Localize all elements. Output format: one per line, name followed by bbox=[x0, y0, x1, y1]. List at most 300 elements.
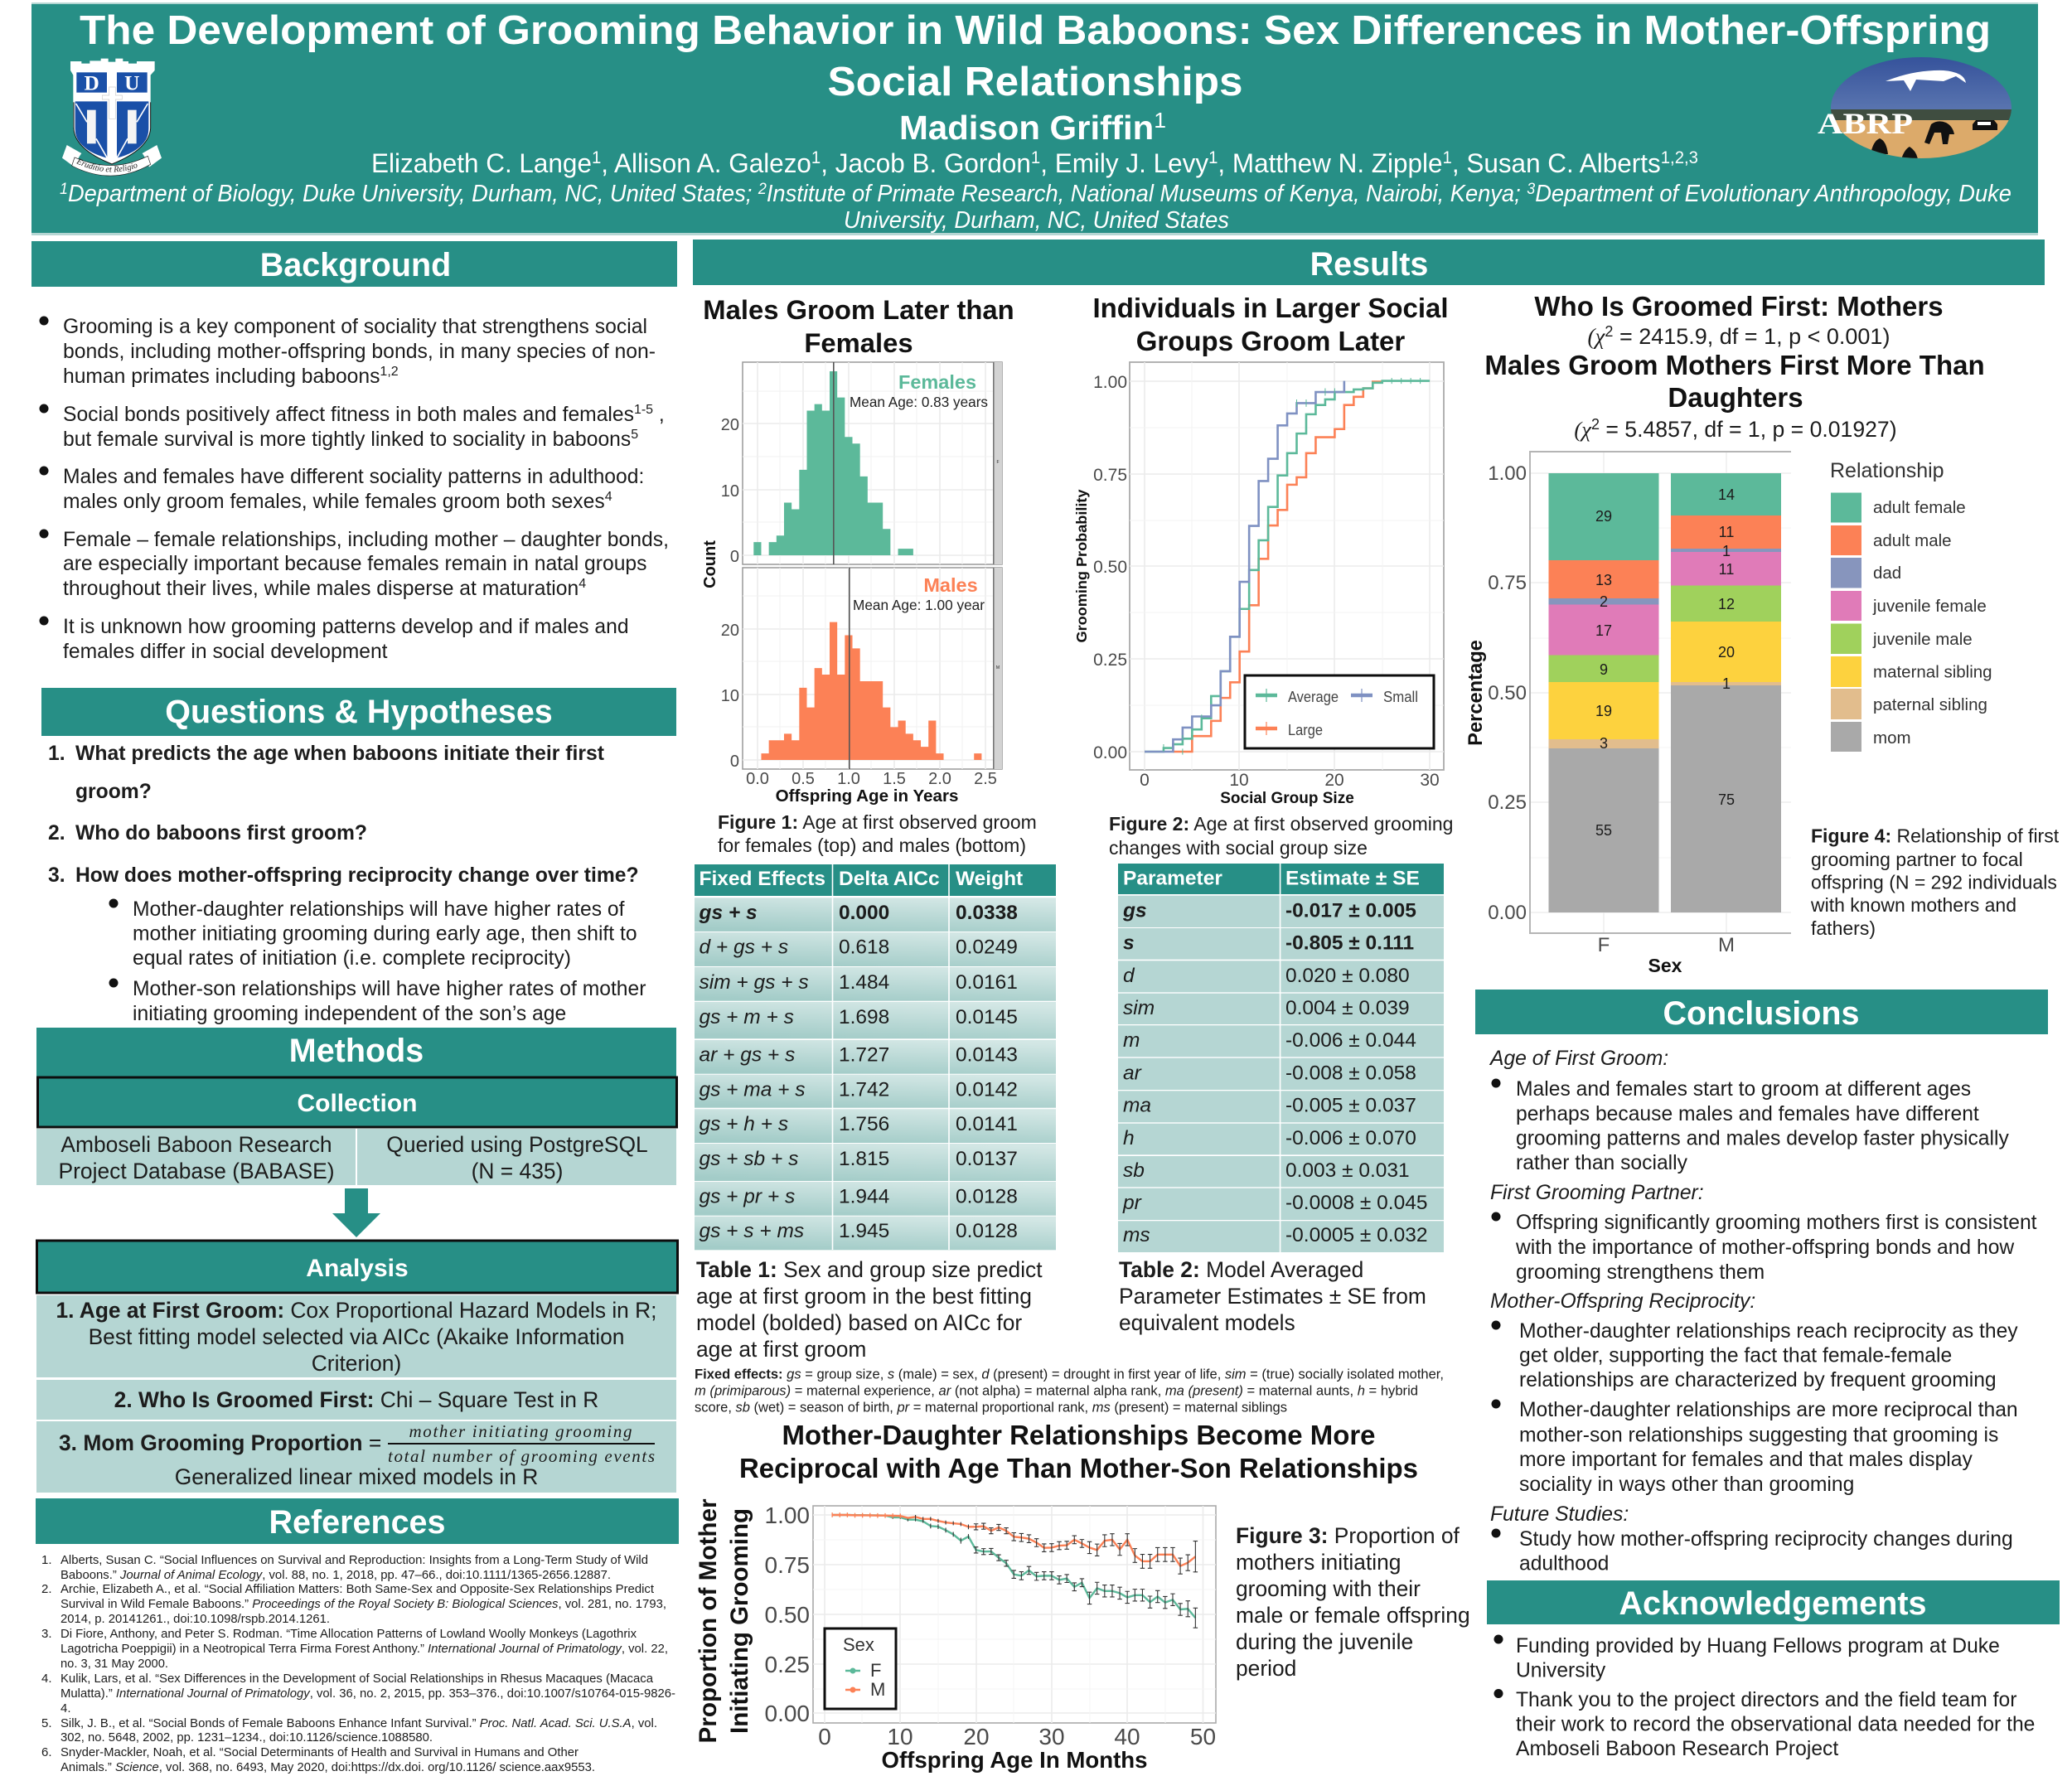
table 2: parameter estimates: s bbox=[1123, 932, 1135, 955]
histogram: females: F bbox=[996, 460, 1000, 465]
table 1: model selection: 0.0142 bbox=[956, 1079, 1018, 1101]
caption: figure 2: changes with social group size bbox=[1109, 837, 1368, 859]
chart headings: figure 4: 2 bbox=[1605, 323, 1613, 340]
acknowledgements text: University bbox=[1516, 1659, 1606, 1682]
reference list: Lagotricha Poeppigii) in a Neotropical Terra Firma Forest Anthony.” International Journal of Primatology, vol. 22, bbox=[61, 1642, 668, 1656]
chart headings: figure 4: Who Is Groomed First: Mothers bbox=[1534, 291, 1944, 322]
bar: male offspring: 14 bbox=[1718, 486, 1735, 503]
legend: group size: Large bbox=[1288, 722, 1323, 738]
histogram: males: Mean Age: 1.00 year bbox=[853, 597, 985, 613]
question list bbox=[48, 743, 646, 1025]
note: fixed effects key: m (primiparous) = maternal experience, ar (not alpha) = maternal alpha rank, ma (present) = maternal aunts, h = hybrid bbox=[695, 1382, 1418, 1399]
axis labels: figure 4: 1.00 bbox=[1488, 462, 1527, 485]
histogram: males: Males bbox=[923, 574, 978, 596]
author list: 1 bbox=[1031, 148, 1040, 167]
chart heading: figure 1: Females bbox=[804, 327, 913, 358]
legend: sex: M bbox=[870, 1679, 885, 1700]
conclusions text: mother-son relationships suggesting that grooming is bbox=[1519, 1424, 1998, 1447]
analysis row 2 bbox=[36, 1380, 676, 1420]
legend: relationship: maternal sibling bbox=[1873, 663, 1992, 681]
x axis: figure 1: 1.5 bbox=[883, 770, 906, 788]
question list: equal rates of initiation (i.e. complete reciprocity) bbox=[133, 947, 571, 970]
bar: male offspring: 1 bbox=[1722, 543, 1731, 559]
panel: conclusions bbox=[1475, 990, 2048, 1575]
conclusions text: Mother-daughter relationships reach reciprocity as they bbox=[1519, 1320, 2018, 1343]
table 1: model selection: 0.0141 bbox=[956, 1113, 1018, 1135]
analysis row 3: formula: 3. Mom Grooming Proportion = bbox=[59, 1430, 381, 1455]
x axis: figure 1: 2.0 bbox=[928, 770, 951, 788]
affiliations: 2 bbox=[758, 181, 767, 198]
legend: relationship: juvenile male bbox=[1872, 630, 1973, 649]
x axis: figure 1: Offspring Age in Years bbox=[776, 786, 958, 806]
axis labels: figure 4: Percentage bbox=[1465, 640, 1487, 746]
table 1: model selection: 0.0143 bbox=[956, 1044, 1018, 1067]
axis labels: figure 2: 10 bbox=[1229, 771, 1249, 790]
table 2: parameter estimates: 0.020 ± 0.080 bbox=[1285, 965, 1410, 987]
conclusions text: Age of First Groom: bbox=[1489, 1048, 1668, 1070]
heading: acknowledgements bbox=[1487, 1580, 2060, 1624]
bar: male offspring: 12 bbox=[1718, 596, 1735, 612]
chart headings: figure 4: = 2415.9, df = 1, p < 0.001) bbox=[1613, 324, 1890, 349]
histogram: males: M bbox=[996, 665, 1000, 670]
bar: female offspring: 29 bbox=[1595, 508, 1612, 525]
caption: figure 4: Figure 4: Relationship of first bbox=[1811, 825, 2060, 847]
header banner bbox=[31, 2, 2038, 235]
panel: acknowledgements bbox=[1487, 1580, 2060, 1760]
axis labels: figure 3: 10 bbox=[887, 1724, 913, 1749]
author list: , Jacob B. Gordon bbox=[821, 148, 1031, 178]
subheading: collection bbox=[38, 1077, 676, 1127]
author list: 1 bbox=[811, 148, 821, 167]
heading: references: References bbox=[269, 1504, 446, 1541]
bar: male offspring bbox=[1671, 473, 1781, 912]
author list: , Allison A. Galezo bbox=[601, 148, 811, 178]
analysis row 3: formula: total number of grooming events bbox=[388, 1446, 655, 1466]
conclusions text: Mother-daughter relationships are more reciprocal than bbox=[1519, 1399, 2018, 1421]
acknowledgements text: Thank you to the project directors and the field team for bbox=[1516, 1689, 2016, 1711]
axis labels: figure 2: 0.75 bbox=[1093, 466, 1127, 485]
axis labels: figure 2: 0 bbox=[1140, 771, 1150, 790]
heading: conclusions bbox=[1475, 990, 2048, 1034]
caption: figure 3: period bbox=[1236, 1656, 1296, 1681]
table 1: model selection: 0.000 bbox=[839, 902, 889, 924]
table 1: model selection: 0.0145 bbox=[956, 1006, 1018, 1028]
reference list: 1. bbox=[41, 1553, 52, 1567]
heading: methods: Methods bbox=[289, 1033, 424, 1069]
author list: 1,2,3 bbox=[1661, 148, 1698, 167]
collection table: Project Database (BABASE) bbox=[59, 1159, 334, 1183]
legend: relationship: mom bbox=[1873, 728, 1911, 748]
histogram: females: Females bbox=[898, 371, 976, 393]
reference list: 4. bbox=[41, 1672, 52, 1686]
chart headings: figure 4: = 5.4857, df = 1, p = 0.01927) bbox=[1600, 417, 1897, 442]
table 2: parameter estimates: -0.0008 ± 0.045 bbox=[1285, 1192, 1427, 1214]
affiliations: Department of Biology, Duke University, Durham, NC, United States; bbox=[68, 181, 758, 207]
bar: female offspring: 19 bbox=[1595, 703, 1612, 719]
chart headings: figure 4: (χ bbox=[1588, 324, 1606, 349]
author list: , Matthew N. Zipple bbox=[1218, 148, 1443, 178]
affiliations: Department of Evolutionary Anthropology, Duke bbox=[1535, 181, 2011, 207]
chart heading: figure 1 bbox=[703, 294, 1014, 358]
histogram: females: 0 bbox=[730, 548, 739, 566]
note: fixed effects key bbox=[695, 1366, 1444, 1415]
caption: figure 3: male or female offspring bbox=[1236, 1603, 1470, 1628]
axis labels: figure 3: Offspring Age In Months bbox=[882, 1747, 1147, 1773]
acknowledgements text: Funding provided by Huang Fellows program at Duke bbox=[1516, 1635, 2000, 1657]
table 2: parameter estimates: m bbox=[1123, 1029, 1140, 1052]
acknowledgements text bbox=[1493, 1634, 2035, 1760]
conclusions text: relationships are characterized by frequent grooming bbox=[1519, 1369, 1997, 1391]
author list: Elizabeth C. Lange bbox=[371, 148, 599, 178]
reference list: Baboons.” Journal of Animal Ecology, vol. 88, no. 1, 2018, pp. 47–66., doi:10.1111/1365-2656.12887. bbox=[61, 1568, 611, 1582]
conclusions text: Study how mother-offspring reciprocity changes during bbox=[1519, 1528, 2013, 1551]
heading: results bbox=[693, 240, 2045, 285]
question list: mother initiating grooming during early age, then shift to bbox=[133, 923, 637, 945]
collection table: Queried using PostgreSQL bbox=[386, 1132, 648, 1157]
author list: , Susan C. Alberts bbox=[1452, 148, 1661, 178]
bullet list: background: Males and females have different sociality patterns in adulthood: bbox=[63, 466, 644, 488]
x axis: figure 1: 1.0 bbox=[837, 770, 860, 788]
heading: conclusions: Conclusions bbox=[1663, 995, 1860, 1032]
affiliations: 1 bbox=[60, 181, 68, 198]
caption: table 2: equivalent models bbox=[1119, 1310, 1295, 1335]
bullet list: background: Grooming is a key component of sociality that strengthens social bbox=[63, 316, 647, 338]
chart heading: figure 3: Reciprocal with Age Than Mother-Son Relationships bbox=[739, 1453, 1418, 1483]
chart heading: figure 3 bbox=[739, 1420, 1418, 1483]
histogram: females: 10 bbox=[721, 482, 739, 501]
bar: female offspring: 9 bbox=[1600, 661, 1608, 678]
bullet list: background: 1-5 bbox=[634, 403, 653, 417]
reference list: Mulatta).” International Journal of Primatology, vol. 36, no. 2, 2015, pp. 353–376., doi:10.1007/s10764-015-9826- bbox=[61, 1686, 675, 1701]
bar: female offspring bbox=[1548, 473, 1659, 912]
chart: figure 3 line chart bbox=[695, 1498, 1216, 1773]
icon: Duke University shield: U bbox=[124, 71, 139, 94]
x axis: figure 1 bbox=[746, 770, 997, 806]
analysis row 2: 2. Who Is Groomed First: Chi – Square Test in R bbox=[114, 1387, 598, 1412]
collection table: Amboseli Baboon Research bbox=[61, 1132, 332, 1157]
axis labels: figure 2: 0.50 bbox=[1093, 558, 1127, 577]
caption: table 2: Table 2: Model Averaged bbox=[1119, 1257, 1363, 1282]
axis labels: figure 3 bbox=[695, 1498, 1216, 1773]
legend: relationship: Relationship bbox=[1830, 459, 1944, 482]
table 1: model selection: 1.815 bbox=[839, 1148, 889, 1170]
table 1: model selection: 1.756 bbox=[839, 1113, 889, 1135]
table 1: model selection: gs + s + ms bbox=[700, 1220, 804, 1242]
bullet list: background: 5 bbox=[631, 428, 638, 442]
conclusions text: more important for females and that males display bbox=[1519, 1449, 1973, 1471]
reference list: Snyder-Mackler, Noah, et al. “Social Determinants of Health and Survival in Humans and Other bbox=[61, 1745, 579, 1759]
bullet list: background bbox=[40, 316, 669, 663]
table 1: model selection: sim + gs + s bbox=[700, 971, 809, 994]
axis labels: figure 3: 40 bbox=[1114, 1724, 1140, 1749]
title: The Development of Grooming Behavior in Wild Baboons: Sex Differences in Mother-Offspring bbox=[80, 8, 1991, 53]
axis labels: figure 2: Social Group Size bbox=[1220, 790, 1354, 807]
caption: figure 1 bbox=[718, 811, 1037, 856]
legend: relationship: adult female bbox=[1873, 498, 1966, 517]
author list: 1 bbox=[1443, 148, 1452, 167]
caption: figure 2: Figure 2: Age at first observed grooming bbox=[1109, 813, 1453, 835]
arrow: collection to analysis bbox=[332, 1188, 380, 1237]
affiliations: 3 bbox=[1527, 181, 1536, 198]
conclusions text: sociality in ways other than grooming bbox=[1519, 1474, 1854, 1496]
caption: table 1 bbox=[696, 1257, 1043, 1362]
axis labels: figure 2 bbox=[1073, 373, 1440, 807]
table 1: model selection: 0.0161 bbox=[956, 971, 1018, 994]
table 2: parameter estimates: ar bbox=[1123, 1062, 1142, 1085]
table 1: model selection: 1.698 bbox=[839, 1006, 889, 1028]
bar: male offspring: 11 bbox=[1719, 524, 1734, 540]
table 2: parameter estimates: ms bbox=[1123, 1224, 1150, 1246]
caption: table 1: age at first groom bbox=[696, 1337, 866, 1362]
bar: female offspring: 55 bbox=[1595, 822, 1612, 839]
caption: figure 1: Figure 1: Age at first observed groom bbox=[718, 811, 1037, 833]
analysis row 3: formula: mother initiating grooming bbox=[409, 1421, 632, 1441]
caption: figure 4: offspring (N = 292 individuals bbox=[1811, 872, 2057, 893]
analysis row 1: 1. Age at First Groom: Cox Proportional Hazard Models in R; bbox=[56, 1298, 656, 1323]
conclusions text bbox=[1489, 1048, 2037, 1575]
legend: relationship bbox=[1830, 459, 1992, 752]
table 1: model selection: 1.484 bbox=[839, 971, 889, 994]
analysis row 1 bbox=[36, 1295, 676, 1377]
bar: female offspring: 13 bbox=[1595, 572, 1612, 588]
table 2: parameter estimates: ma bbox=[1123, 1095, 1151, 1117]
icon: ABRP logo: ABRP bbox=[1818, 107, 1913, 140]
axis labels: figure 3: 20 bbox=[963, 1724, 990, 1749]
panel: background bbox=[31, 241, 677, 663]
table 1: model selection: 0.0249 bbox=[956, 936, 1018, 959]
table 2: parameter estimates: Estimate ± SE bbox=[1285, 868, 1420, 890]
bullet list: background: but female survival is more tightly linked to sociality in baboons bbox=[63, 428, 631, 451]
conclusions text: get older, supporting the fact that female-female bbox=[1519, 1344, 1952, 1367]
caption: figure 4 bbox=[1810, 825, 2060, 939]
subheading: analysis bbox=[36, 1241, 678, 1293]
bullet list: background: are especially important because females remain in natal groups bbox=[63, 553, 646, 575]
chart headings: figure 4: 2 bbox=[1591, 416, 1600, 433]
table 2: parameter estimates: d bbox=[1123, 965, 1135, 987]
axis labels: figure 2: 1.00 bbox=[1093, 373, 1127, 392]
question list: initiating grooming independent of the son’s age bbox=[133, 1003, 566, 1025]
caption: figure 3: mothers initiating bbox=[1236, 1550, 1401, 1575]
affiliations: University, Durham, NC, United States bbox=[844, 207, 1229, 234]
conclusions text: grooming patterns and males develop faster physically bbox=[1516, 1127, 2009, 1150]
table 2: parameter estimates: h bbox=[1123, 1127, 1135, 1149]
reference list: 3. bbox=[41, 1627, 52, 1641]
collection table bbox=[36, 1129, 676, 1185]
table 2: parameter estimates: -0.0005 ± 0.032 bbox=[1285, 1224, 1427, 1246]
reference list: 2. bbox=[41, 1582, 52, 1596]
axis labels: figure 3: 0.50 bbox=[764, 1602, 810, 1628]
conclusions text: Future Studies: bbox=[1490, 1503, 1629, 1526]
analysis row 3: formula bbox=[36, 1421, 676, 1493]
caption: figure 2 bbox=[1109, 813, 1453, 859]
table 2: parameter estimates: -0.006 ± 0.070 bbox=[1285, 1127, 1416, 1149]
chart: figure 2 step curves bbox=[1073, 362, 1444, 807]
bullet list: background: females differ in social development bbox=[63, 641, 388, 663]
bullet list: background: bonds, including mother-offspring bonds, in many species of non- bbox=[63, 341, 656, 363]
table 2: parameter estimates: -0.005 ± 0.037 bbox=[1285, 1095, 1416, 1117]
table 1: model selection: gs + s bbox=[698, 902, 758, 924]
caption: figure 4: with known mothers and bbox=[1810, 894, 2016, 916]
reference list: 4. bbox=[61, 1701, 71, 1716]
chart heading: figure 3: Mother-Daughter Relationships Become More bbox=[782, 1420, 1376, 1450]
table 1: model selection: Weight bbox=[956, 868, 1023, 890]
panel: questions and hypotheses bbox=[41, 688, 676, 1025]
question list: What predicts the age when baboons initiate their first bbox=[75, 743, 604, 765]
histogram: males bbox=[721, 568, 1002, 771]
question list: 2. bbox=[48, 822, 65, 844]
heading: background: Background bbox=[260, 247, 451, 283]
icon: ABRP logo bbox=[1818, 57, 2011, 158]
panel: methods bbox=[36, 1028, 678, 1493]
author list: 1 bbox=[592, 148, 601, 167]
bullet list: background: It is unknown how grooming patterns develop and if males and bbox=[63, 616, 629, 638]
note: fixed effects key: score, sb (wet) = season of birth, pr = maternal proportional rank, ms (present) = maternal siblings bbox=[695, 1399, 1287, 1415]
legend: sex: F bbox=[870, 1660, 881, 1681]
bullet list: background: throughout their lives, while males disperse at maturation bbox=[63, 578, 579, 600]
conclusions text: perhaps because males and females have different bbox=[1516, 1103, 1979, 1125]
analysis row 1: Best fitting model selected via AICc (Akaike Information bbox=[89, 1324, 624, 1349]
conclusions text: Offspring significantly grooming mothers first is consistent bbox=[1516, 1212, 2037, 1234]
bullet list: background: 1,2 bbox=[380, 365, 399, 379]
axis labels: figure 2: 0.00 bbox=[1093, 743, 1127, 762]
table 1: model selection: 1.944 bbox=[839, 1186, 889, 1208]
chart heading: figure 2: Groups Groom Later bbox=[1136, 326, 1405, 356]
bullet list: background: Social bonds positively affect fitness in both males and females bbox=[63, 404, 634, 426]
axis labels: figure 4: 0.00 bbox=[1488, 902, 1527, 924]
legend: relationship: adult male bbox=[1873, 531, 1952, 550]
presenting author: 1 bbox=[1154, 108, 1166, 133]
bullet list: background: males only groom females, while females groom both sexes bbox=[63, 491, 605, 513]
conclusions text: First Grooming Partner: bbox=[1490, 1182, 1704, 1204]
axis labels: figure 3: Proportion of Mother bbox=[695, 1498, 722, 1744]
caption: figure 1: for females (top) and males (bottom) bbox=[718, 835, 1026, 856]
affiliations bbox=[60, 181, 2011, 234]
reference list bbox=[41, 1553, 675, 1774]
table 1: model selection bbox=[695, 864, 1056, 1250]
table 2: parameter estimates: sim bbox=[1123, 997, 1155, 1019]
table 2: parameter estimates: -0.006 ± 0.044 bbox=[1285, 1029, 1416, 1052]
heading: questions: Questions & Hypotheses bbox=[165, 694, 553, 730]
bar: female offspring: 2 bbox=[1600, 593, 1608, 610]
axis labels: figure 2: 0.25 bbox=[1093, 651, 1127, 670]
bar: female offspring: 3 bbox=[1600, 735, 1608, 752]
axis labels: figure 4: Sex bbox=[1648, 955, 1682, 976]
table 2: parameter estimates: gs bbox=[1122, 900, 1147, 922]
chart headings: figure 4: Daughters bbox=[1668, 382, 1803, 413]
table 1: model selection: ar + gs + s bbox=[700, 1044, 795, 1067]
table 1: model selection: gs + h + s bbox=[700, 1113, 788, 1135]
caption: table 2 bbox=[1119, 1257, 1426, 1335]
question list: How does mother-offspring reciprocity change over time? bbox=[75, 864, 639, 887]
chart heading: figure 2: Individuals in Larger Social bbox=[1092, 293, 1449, 323]
table 2: parameter estimates: 0.004 ± 0.039 bbox=[1285, 997, 1410, 1019]
chart headings: figure 4 bbox=[1484, 291, 1985, 442]
reference list: Di Fiore, Anthony, and Peter S. Rodman. “Time Allocation Patterns of Lowland Woolly Monkeys (Lagothrix bbox=[61, 1627, 637, 1641]
title: Social Relationships bbox=[827, 60, 1243, 104]
y axis label: count: Count bbox=[701, 540, 719, 588]
heading: acknowledgements: Acknowledgements bbox=[1619, 1585, 1926, 1622]
legend: group size: Average bbox=[1288, 689, 1339, 705]
reference list: Kulik, Lars, et al. “Sex Differences in the Development of Social Relationships in Rhesus Macaques (Macaca bbox=[61, 1672, 654, 1686]
bullet list: background: human primates including baboons bbox=[63, 365, 380, 388]
caption: figure 4: grooming partner to focal bbox=[1811, 849, 2023, 870]
question list: 3. bbox=[48, 864, 65, 887]
subheading: collection: Collection bbox=[297, 1090, 418, 1117]
question list: groom? bbox=[75, 781, 152, 803]
reference list: 5. bbox=[41, 1716, 52, 1730]
histogram: females: Mean Age: 0.83 years bbox=[850, 394, 988, 410]
heading: methods bbox=[36, 1028, 676, 1078]
table 1: model selection: 1.945 bbox=[839, 1220, 889, 1242]
x axis: figure 1: 0.5 bbox=[792, 770, 815, 788]
axis labels: figure 4: F bbox=[1598, 934, 1610, 956]
table 2: parameter estimates: 0.003 ± 0.031 bbox=[1285, 1159, 1410, 1182]
bar: female offspring: 17 bbox=[1595, 622, 1612, 639]
x axis: figure 1: 0.0 bbox=[746, 770, 769, 788]
table 1: model selection: 0.0338 bbox=[956, 902, 1018, 924]
table 1: model selection: 1.727 bbox=[839, 1044, 889, 1067]
reference list: no. 3, 31 May 2000. bbox=[61, 1657, 168, 1671]
author list: , Emily J. Levy bbox=[1040, 148, 1209, 178]
axis labels: figure 4: 0.25 bbox=[1488, 791, 1527, 814]
title bbox=[80, 8, 1991, 104]
icon: Duke University shield: Eruditio et Religio bbox=[76, 158, 138, 172]
axis labels: figure 3: 0.25 bbox=[764, 1652, 810, 1677]
chart headings: figure 4: Males Groom Mothers First More Than bbox=[1484, 350, 1985, 380]
icon: Duke University shield: D bbox=[85, 71, 99, 94]
table 1: model selection: Fixed Effects bbox=[700, 868, 825, 890]
reference list: Survival in Wild Female Baboons.” Proceedings of the Royal Society B: Biological Sciences, vol. 281, no. 1793, bbox=[61, 1597, 666, 1611]
table 2: parameter estimates bbox=[1118, 864, 1444, 1252]
axis labels: figure 4: 0.50 bbox=[1488, 682, 1527, 704]
reference list: Archie, Elizabeth A., et al. “Social Affiliation Matters: Both Same-Sex and Opposite-Sex Relationships Predict bbox=[61, 1582, 655, 1596]
bar: male offspring: 1 bbox=[1722, 675, 1731, 692]
conclusions text: Mother-Offspring Reciprocity: bbox=[1490, 1290, 1755, 1313]
axis labels: figure 2: 20 bbox=[1324, 771, 1344, 790]
chart headings: figure 4: (χ bbox=[1574, 417, 1592, 442]
table 2: parameter estimates: -0.017 ± 0.005 bbox=[1285, 900, 1416, 922]
caption: figure 3 bbox=[1236, 1523, 1470, 1681]
bullet list: background: 4 bbox=[605, 490, 612, 504]
table 1: model selection: 0.0128 bbox=[956, 1186, 1018, 1208]
table 2: parameter estimates: -0.008 ± 0.058 bbox=[1285, 1062, 1416, 1085]
table 2: parameter estimates: pr bbox=[1122, 1192, 1142, 1214]
legend: relationship: paternal sibling bbox=[1873, 695, 1987, 714]
question list: 1. bbox=[48, 743, 65, 765]
table 1: model selection: d + gs + s bbox=[700, 936, 788, 959]
axis labels: figure 4: 0.75 bbox=[1488, 572, 1527, 594]
table 2: parameter estimates: sb bbox=[1123, 1159, 1145, 1182]
presenting author: Madison Griffin bbox=[899, 109, 1149, 147]
axis labels: figure 3: 0 bbox=[818, 1724, 831, 1749]
table 1: model selection: Delta AICc bbox=[839, 868, 940, 890]
conclusions text: rather than socially bbox=[1516, 1152, 1688, 1174]
caption: figure 3: during the juvenile bbox=[1236, 1629, 1413, 1654]
chart heading: figure 1: Males Groom Later than bbox=[703, 294, 1014, 325]
legend: sex: Sex bbox=[843, 1634, 874, 1655]
legend: sex bbox=[825, 1628, 896, 1709]
bar: male offspring: 11 bbox=[1719, 561, 1734, 578]
axis labels: figure 3: 1.00 bbox=[764, 1503, 810, 1528]
reference list: 302, no. 5648, 2002, pp. 1231–1234., doi:10.1126/science.1088580. bbox=[61, 1730, 433, 1745]
acknowledgements text: Amboseli Baboon Research Project bbox=[1516, 1738, 1838, 1760]
axis labels: figure 3: Initiating Grooming bbox=[726, 1508, 753, 1734]
analysis row 3: formula: Generalized linear mixed models in R bbox=[175, 1464, 538, 1489]
legend: group size: Small bbox=[1383, 689, 1418, 705]
conclusions text: grooming strengthens them bbox=[1516, 1261, 1765, 1284]
reference list: 2014, p. 20141261., doi:10.1098/rspb.2014.1261. bbox=[61, 1612, 330, 1626]
caption: figure 3: grooming with their bbox=[1236, 1576, 1421, 1601]
